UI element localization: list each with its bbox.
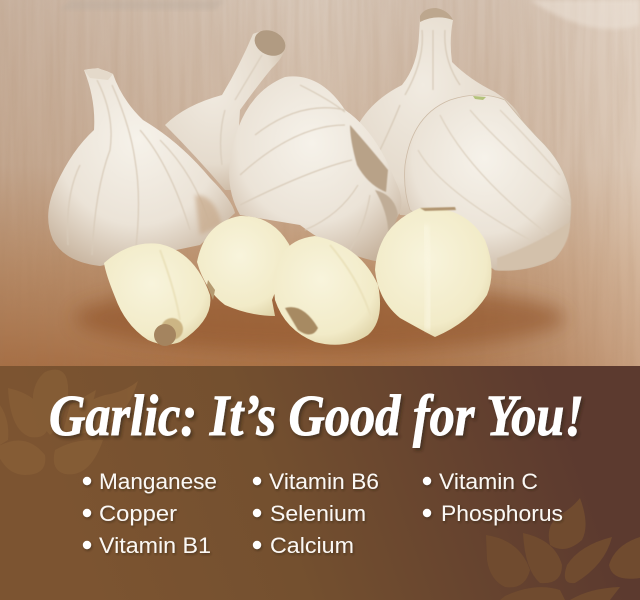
nutrient list: column 2: Vitamin B6 xyxy=(269,469,379,494)
nutrient list: column 2: Calcium xyxy=(270,533,354,558)
leaf motif: bottom right xyxy=(486,498,640,600)
nutrient list: column 1 xyxy=(83,469,217,558)
nutrient list: column 3: Phosphorus xyxy=(441,501,563,526)
contact shadow on table xyxy=(75,284,565,352)
clove 1 xyxy=(104,243,210,346)
brown text panel xyxy=(0,366,640,600)
nutrient list: column 2 xyxy=(253,469,379,558)
nutrient list: column 1: Manganese xyxy=(99,469,217,494)
photo: garlic bulbs and cloves xyxy=(48,8,571,346)
photo background: wooden table xyxy=(0,0,640,366)
right bulb xyxy=(405,95,571,270)
nutrient list: column 3 xyxy=(423,469,563,526)
clove 3 xyxy=(273,236,380,345)
left bulb xyxy=(48,68,235,266)
back right bulb xyxy=(358,8,521,220)
nutrient list: column 3: Vitamin C xyxy=(439,469,538,494)
back centre bulb xyxy=(165,25,290,190)
leaf motif: top left xyxy=(0,370,138,475)
clove 4 xyxy=(375,207,492,337)
clove 2 xyxy=(197,216,292,316)
nutrient list: column 1: Copper xyxy=(99,501,177,526)
centre bulb xyxy=(229,76,402,262)
nutrient list: column 1: Vitamin B1 xyxy=(99,533,211,558)
nutrient list: column 2: Selenium xyxy=(270,501,366,526)
